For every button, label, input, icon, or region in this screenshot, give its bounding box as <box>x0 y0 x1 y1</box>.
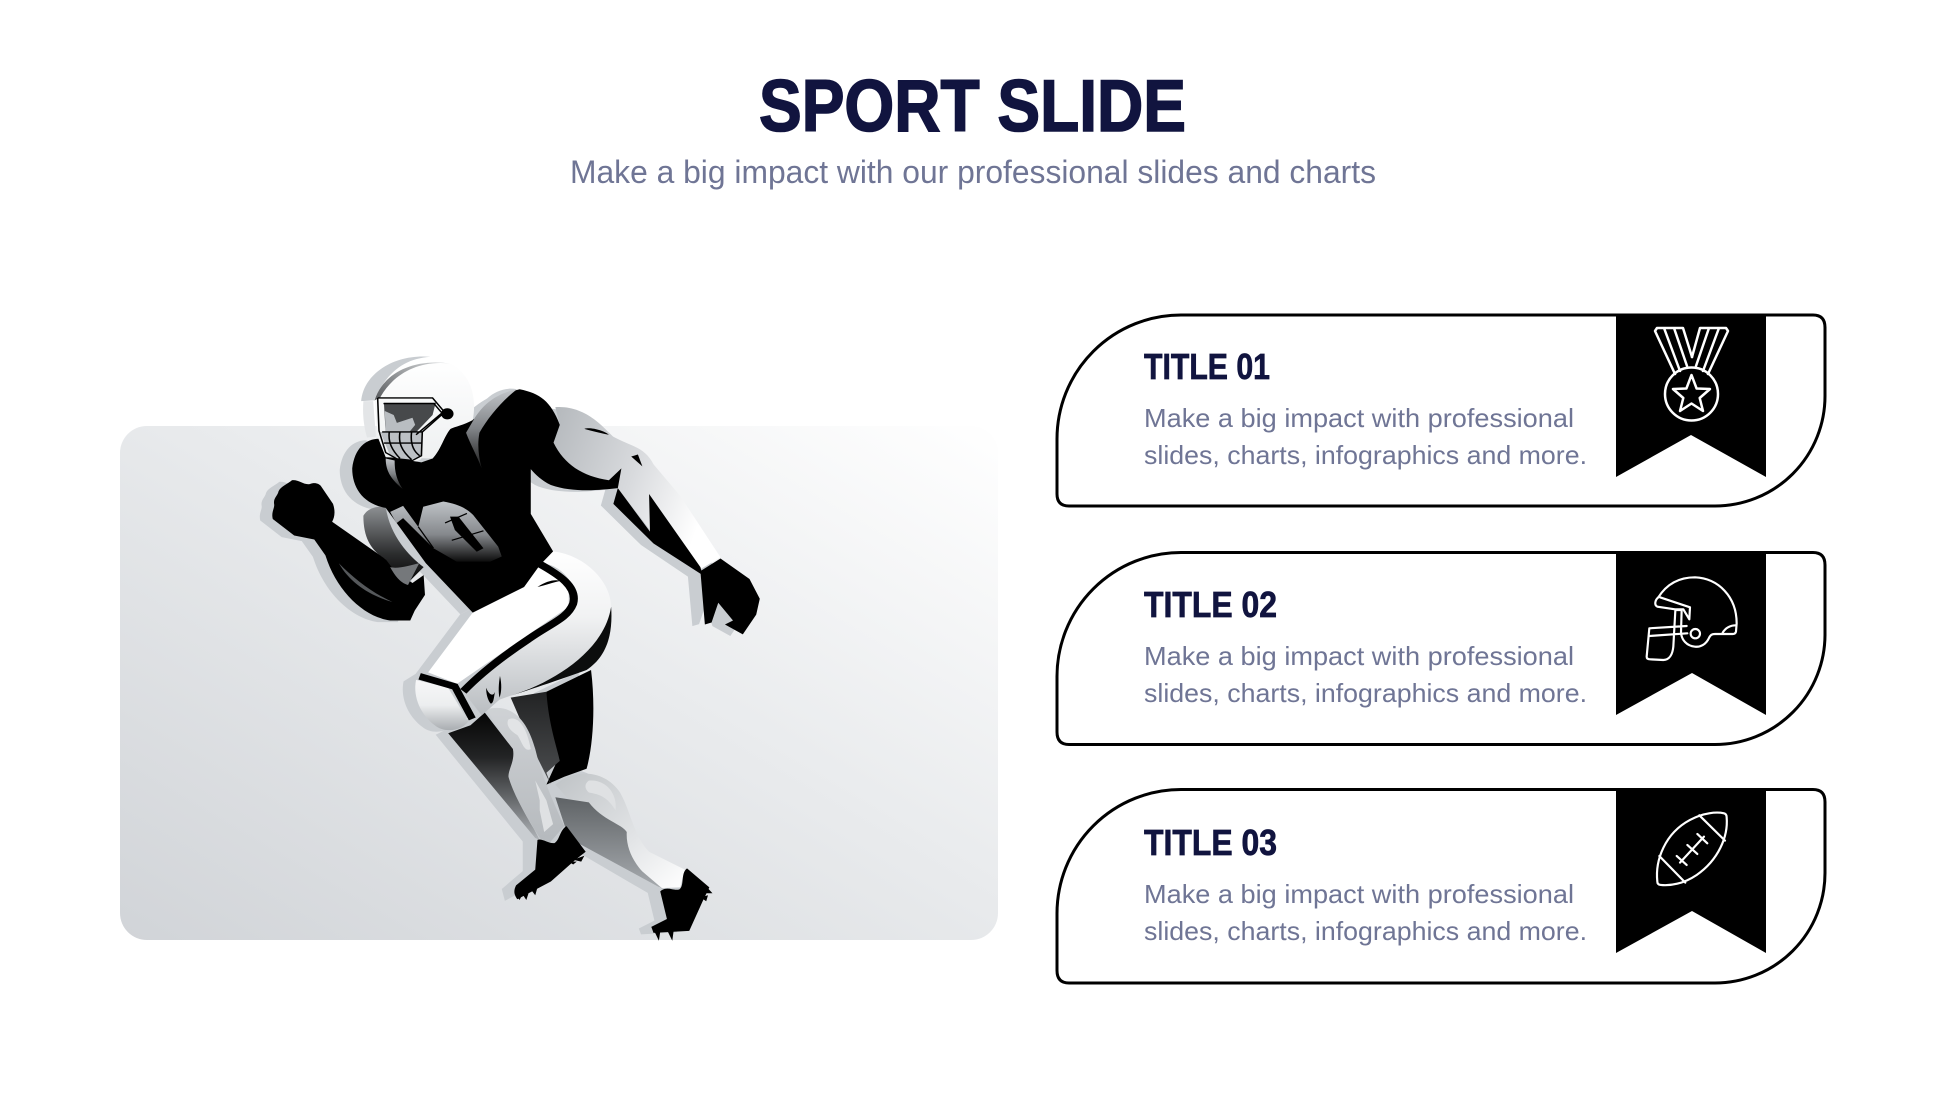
title: SPORT SLIDE <box>759 66 1186 147</box>
jersey number 10 <box>390 502 502 562</box>
face mask <box>380 432 422 460</box>
card title: TITLE 01 <box>1144 346 1270 387</box>
right arm with hand <box>554 407 760 634</box>
card text: slides, charts, infographics and more. <box>1144 916 1587 946</box>
card outline <box>1057 552 1825 744</box>
knee pad <box>415 676 472 730</box>
ear bolt <box>441 408 454 419</box>
card 2 <box>1057 552 1825 744</box>
card outline <box>1057 790 1825 983</box>
icon: medal <box>1655 328 1728 420</box>
back lower leg <box>555 774 685 889</box>
football player illustration <box>260 357 760 941</box>
card text <box>1144 641 1587 708</box>
card text: Make a big impact with professional <box>1144 641 1574 671</box>
icon: football <box>1657 813 1727 885</box>
card text <box>1144 879 1587 946</box>
player offset shadow <box>260 391 747 934</box>
helmet <box>361 357 474 460</box>
ribbon <box>1616 552 1766 715</box>
background panel <box>120 426 998 940</box>
shoulder stripes <box>474 389 517 419</box>
card text <box>1144 403 1587 470</box>
card text: Make a big impact with professional <box>1144 879 1574 909</box>
card 3 <box>1057 789 1825 983</box>
card title: TITLE 02 <box>1144 584 1277 625</box>
card title: TITLE 03 <box>1144 822 1277 863</box>
visor <box>384 403 436 434</box>
card outline <box>1057 315 1825 506</box>
ribbon <box>1616 789 1766 953</box>
icon: helmet <box>1647 577 1737 660</box>
card text: slides, charts, infographics and more. <box>1144 678 1587 708</box>
subtitle: Make a big impact with our professional slides and charts <box>570 154 1376 190</box>
back leg upper <box>511 670 593 785</box>
jersey <box>352 389 621 613</box>
card 1 <box>1057 314 1825 506</box>
card text: Make a big impact with professional <box>1144 403 1574 433</box>
card text: slides, charts, infographics and more. <box>1144 440 1587 470</box>
front lower leg <box>448 708 564 844</box>
pants <box>428 551 611 715</box>
ribbon <box>1616 314 1766 477</box>
left arm with fist <box>272 480 425 621</box>
cleats <box>514 826 712 941</box>
